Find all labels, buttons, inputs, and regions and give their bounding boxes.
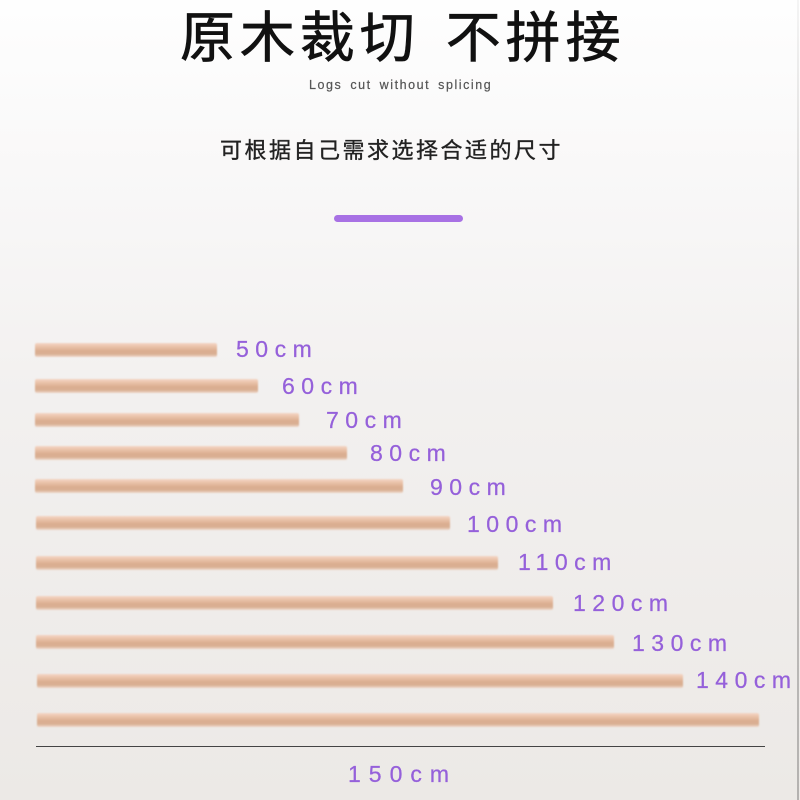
purple accent bar	[334, 215, 463, 222]
rod 140cm	[37, 674, 683, 688]
label 120cm: 120cm	[573, 590, 675, 616]
label 90cm: 90cm	[430, 474, 512, 500]
rod 100cm	[36, 516, 450, 530]
rod 60cm	[35, 379, 258, 393]
label 70cm: 70cm	[326, 407, 408, 433]
rod 70cm	[35, 413, 299, 427]
title: 原木裁切 不拼接	[180, 7, 625, 69]
rod 80cm	[35, 446, 347, 460]
rod 50cm	[35, 343, 217, 357]
rod 120cm	[36, 596, 553, 610]
label 140cm: 140cm	[696, 667, 798, 693]
label 50cm: 50cm	[236, 336, 318, 362]
label 130cm: 130cm	[632, 630, 734, 656]
label 80cm: 80cm	[370, 440, 452, 466]
size chart: rods and length labels	[34, 336, 798, 787]
label 110cm: 110cm	[518, 549, 618, 575]
label 60cm: 60cm	[282, 373, 364, 399]
rod 110cm	[36, 556, 498, 570]
label 100cm: 100cm	[467, 511, 569, 537]
description text: 可根据自己需求选择合适的尺寸	[220, 138, 563, 163]
rod 90cm	[35, 479, 403, 493]
english subtitle: Logs cut without splicing	[309, 78, 492, 92]
right edge line	[797, 0, 799, 800]
rod 130cm	[36, 635, 614, 649]
baseline	[36, 746, 765, 747]
label 150cm: 150cm	[348, 761, 457, 787]
rod 150cm	[37, 713, 759, 727]
